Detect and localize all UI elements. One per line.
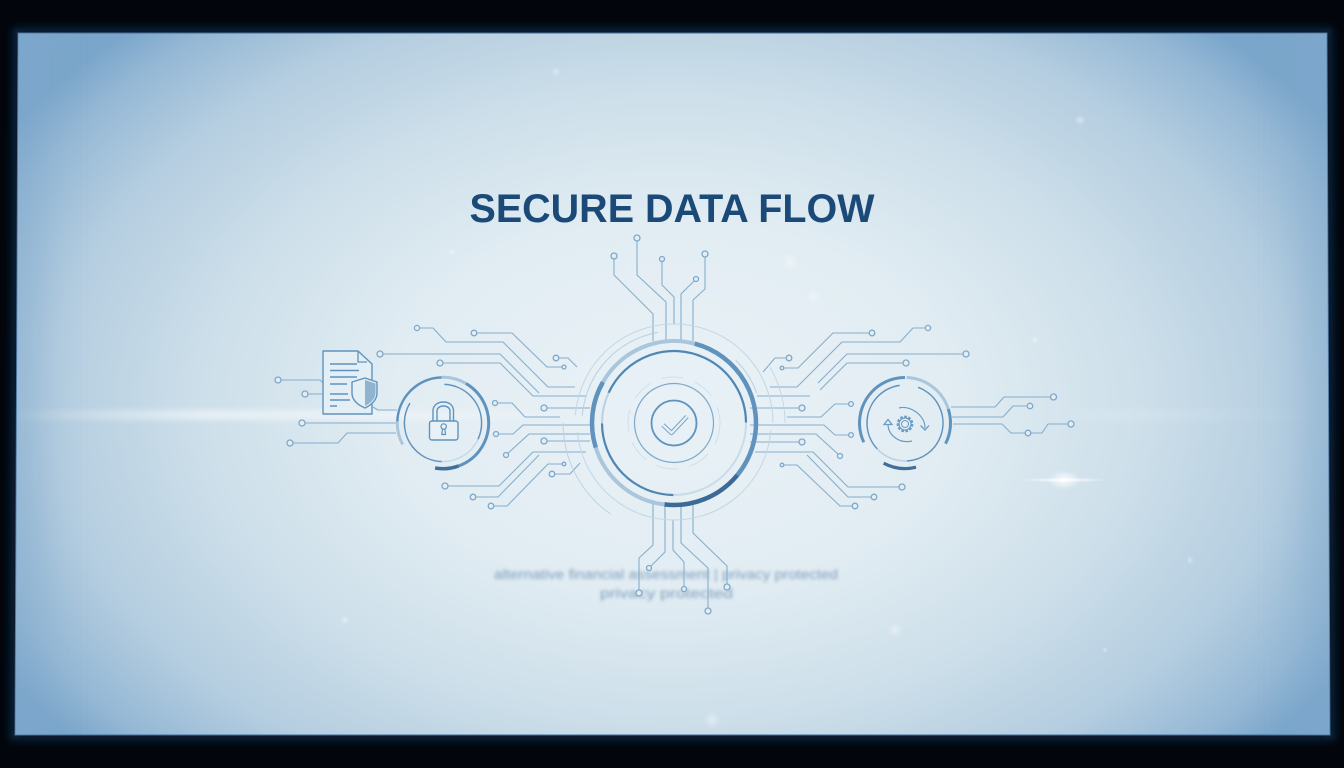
- horizontal light streak: [18, 410, 638, 420]
- lock ring: [381, 361, 505, 485]
- bokeh particles: [340, 67, 1194, 729]
- icon: gear with rotating arrows: [884, 407, 929, 442]
- blurred caption: privacy protected: [600, 586, 733, 601]
- icon: padlock: [430, 402, 458, 440]
- central ring: [519, 268, 829, 578]
- circuit traces: right: [750, 325, 969, 509]
- gear ring: [845, 363, 965, 483]
- circuit traces: document and lock inputs: [275, 377, 397, 446]
- circuit traces: gear outputs: [951, 394, 1074, 436]
- circuit traces: bottom: [636, 500, 730, 614]
- icon: document with shield: [323, 351, 377, 414]
- right light streak: [1040, 408, 1330, 422]
- circuit diagram: [275, 235, 1074, 614]
- lens flare star: [1018, 470, 1110, 490]
- blurred caption: [494, 567, 838, 601]
- blurred caption: alternative financial assessment | privacy protected: [494, 567, 838, 582]
- circuit traces: left: [377, 325, 590, 509]
- title: SECURE DATA FLOW: [470, 187, 875, 231]
- circuit traces: top: [611, 235, 708, 341]
- icon: check mark: [652, 400, 696, 446]
